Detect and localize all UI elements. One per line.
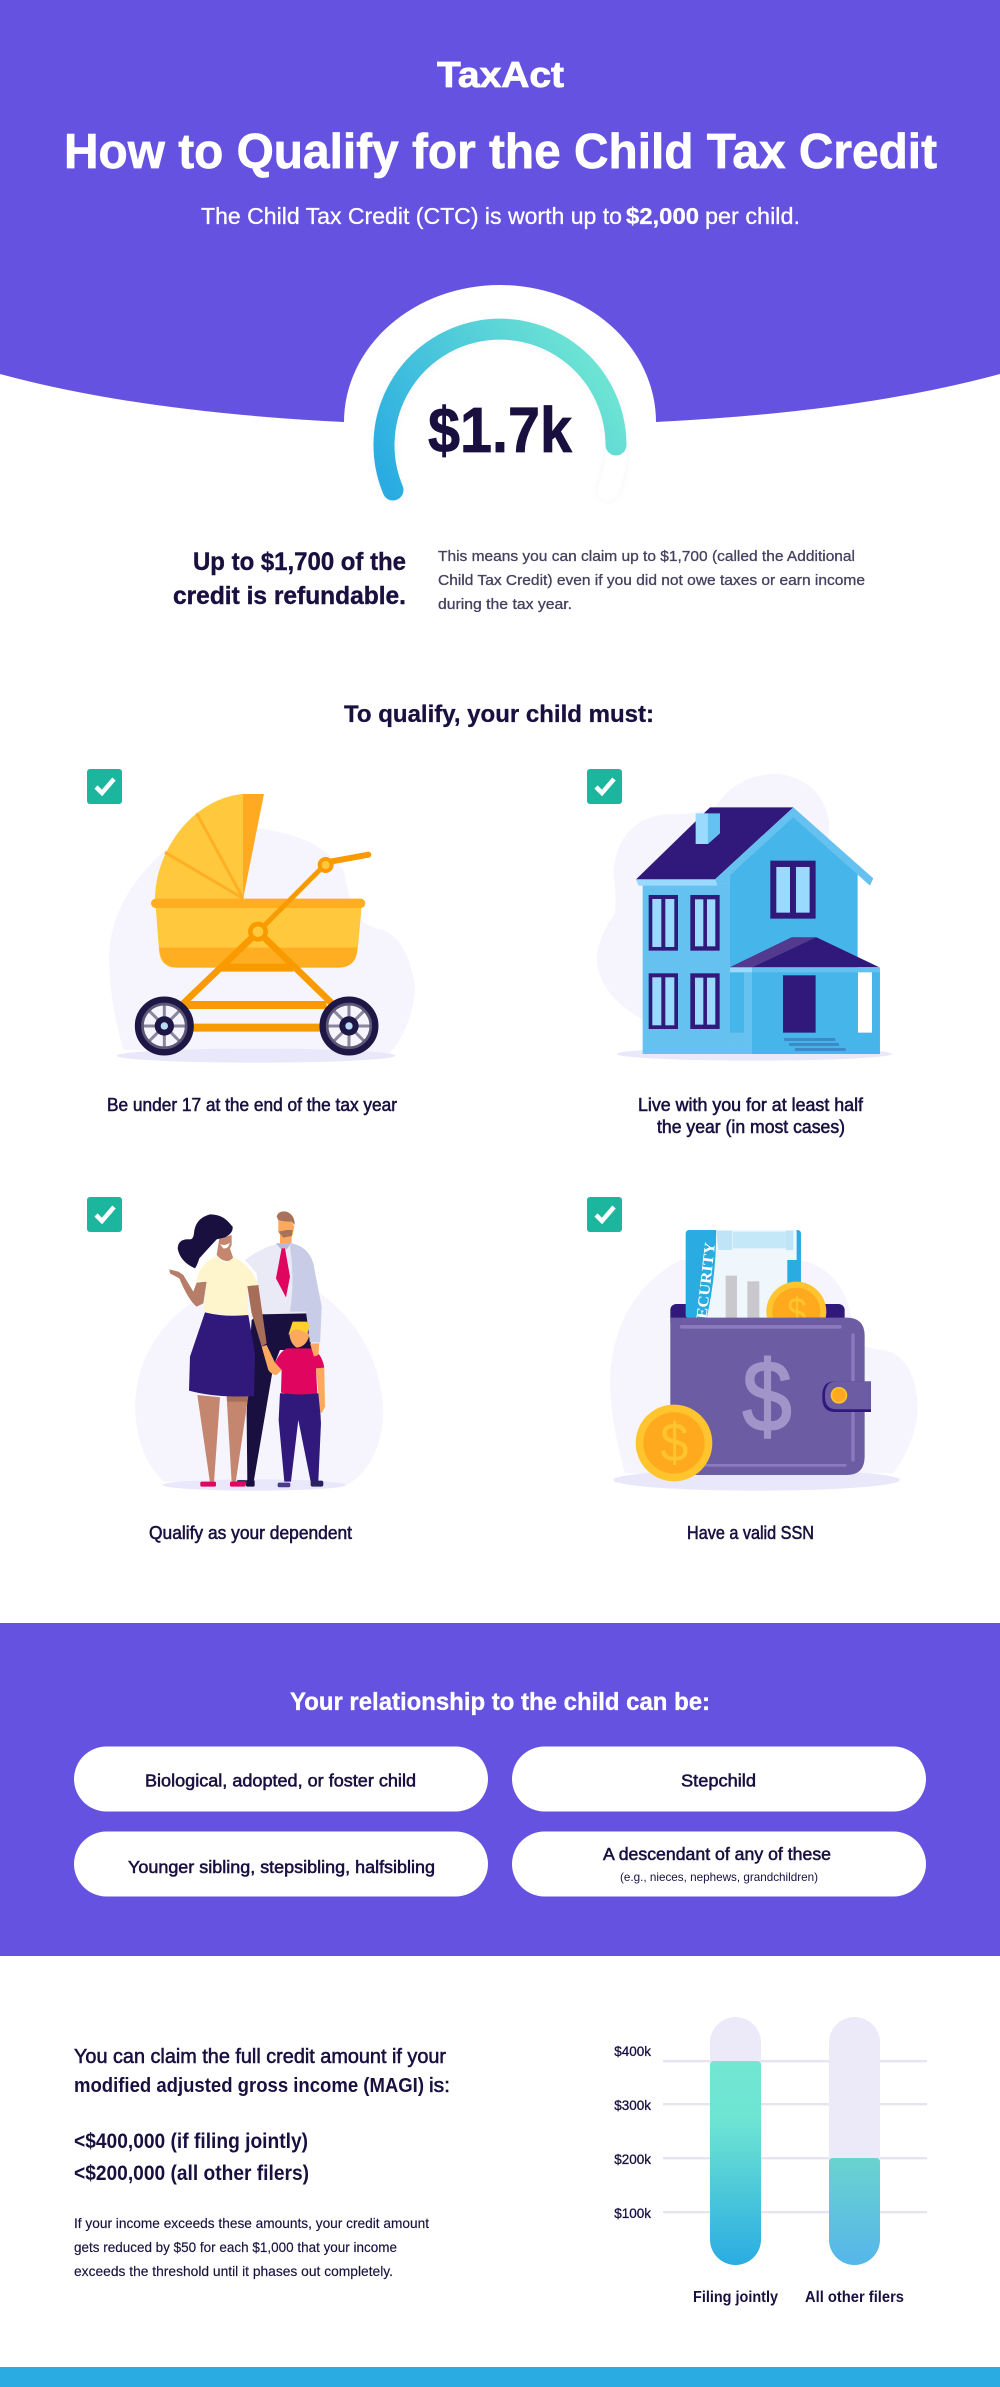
social security card — [686, 1230, 801, 1329]
pill: stepchild — [512, 1746, 926, 1812]
icon: checkbox — [87, 769, 122, 804]
pill: biological — [74, 1746, 488, 1812]
footer bar — [0, 2367, 1000, 2387]
income thresholds — [74, 2130, 309, 2185]
panel: relationship — [0, 1623, 1000, 1956]
axis labels: $200k — [614, 2152, 651, 2167]
income note — [74, 2215, 429, 2279]
refundable heading — [173, 548, 406, 610]
caption: the year (in most cases) — [657, 1117, 845, 1137]
illustration: wallet with SSN card and coins: $ — [742, 1341, 792, 1453]
illustration: wallet with SSN card and coins — [610, 1230, 918, 1491]
refundable explanation: during the tax year. — [438, 596, 572, 613]
coin front: $ — [660, 1412, 688, 1474]
caption: Qualify as your dependent — [149, 1523, 352, 1543]
gauge: $1.7k refundable — [384, 329, 616, 490]
panel: dependent — [87, 1197, 383, 1543]
panel: live with you — [587, 769, 892, 1137]
gauge value: $1.7k — [428, 394, 572, 466]
bar: all other filers — [829, 2017, 880, 2265]
bar chart: MAGI thresholds — [614, 2017, 927, 2306]
income note: gets reduced by $50 for each $1,000 that your income — [74, 2239, 397, 2255]
axis labels — [614, 2044, 651, 2221]
refundable explanation — [438, 548, 865, 613]
pill: sibling: Younger sibling, stepsibling, halfsibling — [128, 1857, 435, 1877]
wheel right — [323, 1000, 375, 1052]
illustration: family — [135, 1211, 383, 1491]
coin behind wallet — [766, 1282, 826, 1318]
subtitle: $2,000 — [626, 203, 699, 229]
axis labels: $100k — [614, 2206, 651, 2221]
clasp — [822, 1381, 871, 1412]
pill: biological: Biological, adopted, or foster child — [145, 1770, 416, 1790]
income intro: You can claim the full credit amount if your — [74, 2046, 446, 2068]
woman — [169, 1214, 267, 1487]
social security card: SECURITY — [692, 1241, 719, 1329]
bar labels — [693, 2289, 904, 2306]
pill: sibling — [74, 1832, 488, 1896]
income note: exceeds the threshold until it phases out completely. — [74, 2263, 393, 2279]
wheel left — [138, 1000, 191, 1052]
section heading: to qualify: To qualify, your child must: — [344, 701, 654, 728]
bar labels: Filing jointly — [693, 2289, 778, 2306]
title: How to Qualify for the Child Tax Credit — [64, 125, 937, 179]
income thresholds: <$200,000 (all other filers) — [74, 2162, 309, 2185]
caption: Live with you for at least half — [638, 1095, 864, 1115]
child — [262, 1322, 325, 1487]
pill: stepchild: Stepchild — [681, 1770, 756, 1790]
relationship heading: Your relationship to the child can be: — [290, 1688, 710, 1716]
caption — [638, 1095, 864, 1137]
income intro — [74, 2046, 450, 2097]
caption: Be under 17 at the end of the tax year — [107, 1095, 397, 1115]
pill: descendant: A descendant of any of these — [603, 1844, 831, 1864]
income intro: is: — [429, 2075, 450, 2097]
income intro: modified adjusted gross income (MAGI) — [74, 2075, 424, 2097]
income thresholds: <$400,000 (if filing jointly) — [74, 2130, 308, 2153]
panel: under 17 — [87, 769, 415, 1115]
axis labels: $300k — [614, 2098, 651, 2113]
refundable explanation: This means you can claim up to $1,700 (called the Additional — [438, 548, 855, 565]
man — [237, 1211, 322, 1487]
refundable heading: credit is refundable. — [173, 582, 406, 610]
icon: house — [597, 773, 892, 1061]
income text block — [74, 2046, 450, 2279]
bar: filing jointly — [710, 2017, 761, 2265]
axis labels: $400k — [614, 2044, 651, 2059]
pill: descendant — [512, 1832, 926, 1896]
refundable heading: Up to $1,700 of the — [193, 548, 406, 576]
refundable explanation: Child Tax Credit) even if you did not owe taxes or earn income — [438, 572, 865, 589]
pill: descendant: (e.g., nieces, nephews, grandchildren) — [620, 1870, 818, 1884]
income note: If your income exceeds these amounts, your credit amount — [74, 2215, 429, 2231]
caption: Have a valid SSN — [687, 1523, 814, 1543]
subtitle: per child. — [705, 203, 800, 229]
panel: valid SSN — [587, 1197, 918, 1543]
icon: checkbox — [87, 1197, 122, 1232]
coin front — [636, 1405, 712, 1481]
subtitle: The Child Tax Credit (CTC) is worth up to — [201, 203, 622, 229]
icon: checkbox — [587, 769, 622, 804]
header panel — [0, 0, 1000, 422]
coin behind wallet: $ — [787, 1289, 807, 1336]
logo: TaxAct: TaxAct — [437, 54, 564, 95]
icon: baby stroller — [109, 794, 415, 1063]
icon: checkbox — [587, 1197, 622, 1232]
bar labels: All other filers — [805, 2289, 904, 2306]
